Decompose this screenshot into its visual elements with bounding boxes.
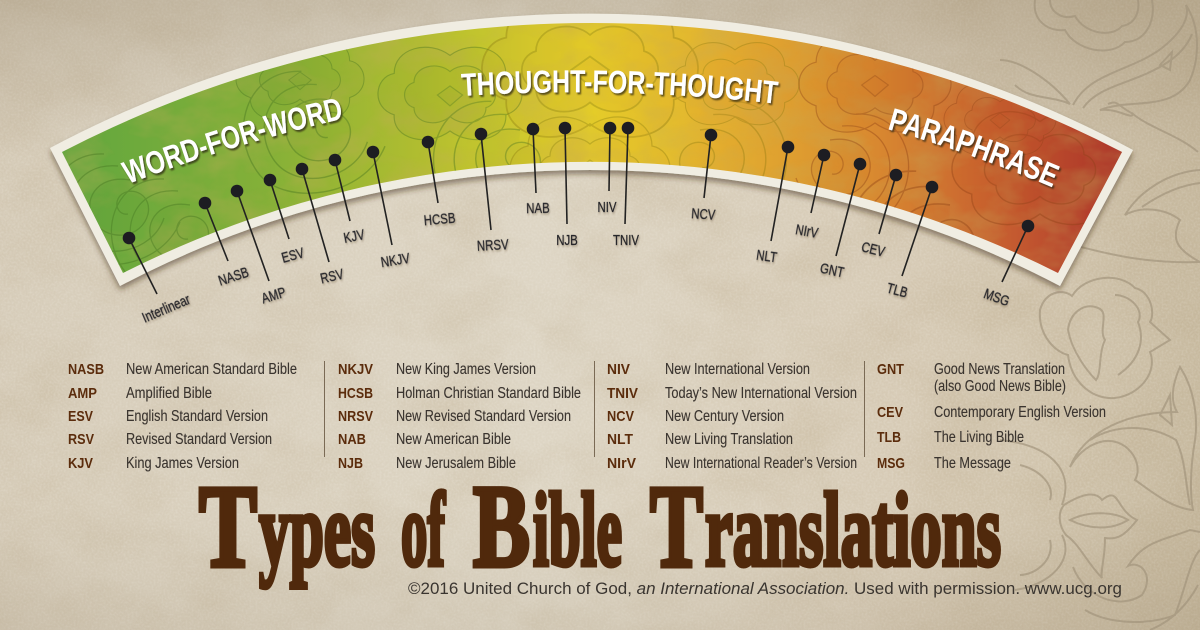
arc fill: green to yellow to red gradient	[62, 23, 1122, 273]
pin: ESV: ESV	[279, 244, 306, 266]
top flower	[1035, 0, 1153, 51]
ornament: engraved floral scrollwork on the right	[1000, 0, 1200, 630]
legend column 4: (also Good News Bible)	[934, 378, 1066, 395]
legend column 4: CEV	[877, 404, 903, 421]
pin: NCV	[691, 129, 717, 223]
pin: NCV: NCV	[691, 205, 716, 223]
title: Types of Bible Translations: of	[401, 471, 446, 588]
legend column 2: NJB	[338, 455, 363, 472]
legend column 1: RSV	[68, 431, 94, 448]
legend column 2	[338, 361, 581, 472]
title: Types of Bible Translations: ranslations	[705, 471, 1001, 588]
pin: HCSB: HCSB	[423, 209, 456, 229]
lower swirl	[1070, 367, 1196, 510]
legend column 3: NIrV	[607, 455, 636, 472]
title: Types of Bible Translations: B	[473, 461, 530, 592]
pin: NKJV	[367, 146, 411, 271]
legend column 4: GNT	[877, 361, 904, 378]
legend column 3: NLT	[607, 431, 633, 448]
legend column 1: King James Version	[126, 455, 239, 472]
legend column 3: New International Version	[665, 361, 810, 378]
pin: TLB	[885, 181, 938, 301]
legend column 4: Good News Translation	[934, 361, 1065, 378]
pin: NIrV: NIrV	[794, 221, 820, 241]
pin: NASB	[199, 197, 251, 289]
arc frame: white torn border	[50, 14, 1133, 286]
pin: AMP: AMP	[259, 283, 288, 307]
legend column 1: NASB	[68, 361, 104, 378]
pin: Interlinear	[123, 232, 193, 326]
legend column 4: Contemporary English Version	[934, 404, 1106, 421]
title: Types of Bible Translations: ypes	[259, 471, 375, 588]
pin: RSV	[296, 163, 345, 287]
title: Types of Bible Translations: T	[650, 461, 703, 592]
legend column 2: Holman Christian Standard Bible	[396, 385, 581, 402]
pin: CEV: CEV	[860, 238, 887, 260]
arc band: translation spectrum	[48, 14, 1136, 292]
legend column 4: The Living Bible	[934, 429, 1024, 446]
legend column 2: New American Bible	[396, 431, 511, 448]
legend column 4: MSG	[877, 455, 905, 472]
pin: KJV: KJV	[342, 226, 366, 246]
title: Types of Bible Translations: ible	[533, 471, 622, 588]
pin: NRSV	[475, 128, 509, 254]
title: Types of Bible Translations	[199, 461, 1001, 592]
legend column 3: New Century Version	[665, 408, 784, 425]
legend column 1: New American Standard Bible	[126, 361, 297, 378]
legend column 2: New Revised Standard Version	[396, 408, 571, 425]
pin: NIV: NIV	[598, 198, 617, 215]
legend column 1: KJV	[68, 455, 93, 472]
legend column 3: New International Reader’s Version	[665, 455, 857, 472]
copyright credit: ©2016 United Church of God, an International Association. Used with permission. www.ucg.org	[408, 580, 1122, 598]
legend column 1: English Standard Version	[126, 408, 268, 425]
bottom swirl	[1073, 530, 1200, 601]
legend column 3	[607, 361, 857, 472]
legend column 4	[877, 361, 1106, 472]
pin: TNIV	[613, 122, 639, 248]
top swirl and leaf	[1073, 5, 1198, 152]
pin: CEV	[860, 169, 902, 260]
legend column 1: ESV	[68, 408, 93, 425]
pin: GNT: GNT	[819, 259, 846, 281]
legend column 3: New Living Translation	[665, 431, 793, 448]
pin: ESV	[264, 174, 306, 266]
pin: GNT	[819, 158, 866, 281]
legend column 3: NIV	[607, 361, 630, 378]
heading: word-for-word: WORD-FOR-WORD	[120, 99, 344, 186]
pin: NJB	[556, 122, 578, 248]
legend column 2: NKJV	[338, 361, 373, 378]
pin: NJB: NJB	[556, 231, 578, 248]
pin: Interlinear: Interlinear	[139, 290, 193, 326]
legend column 3: NCV	[607, 408, 634, 425]
legend column 1: Revised Standard Version	[126, 431, 272, 448]
pin: KJV	[329, 154, 366, 246]
legend column 2: New Jerusalem Bible	[396, 455, 516, 472]
legend column 2: NAB	[338, 431, 366, 448]
legend column 2: NRSV	[338, 408, 373, 425]
pin: NAB	[526, 123, 550, 217]
legend column 3: TNIV	[607, 385, 638, 402]
pin: HCSB	[422, 136, 456, 229]
legend column 4: The Message	[934, 455, 1011, 472]
legend column 1: Amplified Bible	[126, 385, 212, 402]
pin: NAB: NAB	[526, 199, 550, 217]
pin: NASB: NASB	[216, 263, 251, 289]
legend column 2: New King James Version	[396, 361, 536, 378]
lower flower	[1060, 495, 1137, 578]
legend column 1: AMP	[68, 385, 97, 402]
pin: MSG	[982, 220, 1034, 310]
pin: TLB: TLB	[885, 279, 910, 301]
pin: TNIV: TNIV	[613, 231, 639, 248]
legend column 3: Today’s New International Version	[665, 385, 857, 402]
legend column 1	[68, 361, 297, 472]
pin: MSG: MSG	[982, 285, 1012, 310]
pin: RSV: RSV	[319, 265, 345, 287]
pin: AMP	[231, 185, 288, 307]
middle flower	[1040, 278, 1170, 398]
legend column 4: TLB	[877, 429, 901, 446]
title: Types of Bible Translations: T	[199, 461, 257, 592]
pin: NLT	[755, 141, 794, 266]
heading: thought-for-thought: THOUGHT-FOR-THOUGHT	[461, 70, 781, 106]
pin: NIrV	[794, 149, 830, 241]
pin: NLT: NLT	[755, 246, 778, 266]
heading: paraphrase: PARAPHRASE	[888, 108, 1062, 190]
pin: NRSV: NRSV	[476, 236, 509, 254]
legend column 2: HCSB	[338, 385, 373, 402]
pin: NKJV: NKJV	[380, 249, 411, 271]
pin: NIV	[598, 122, 617, 215]
